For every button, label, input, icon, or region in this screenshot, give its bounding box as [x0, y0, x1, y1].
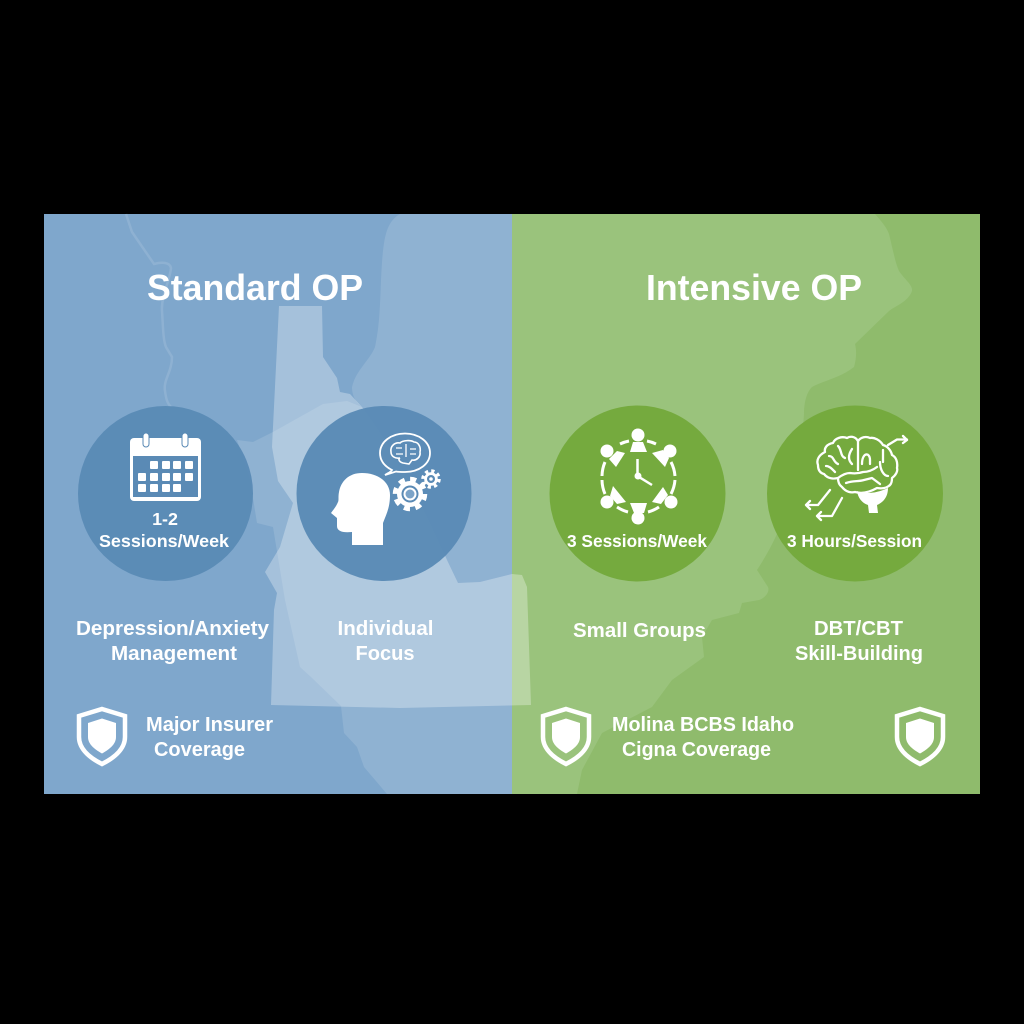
circle label: 1-2 Sessions/Week: 1-2 [152, 509, 178, 529]
circle: 3 hours per session [767, 406, 943, 582]
icon: clock hands and ring arcs [602, 441, 675, 512]
icon: shield green panel right [897, 709, 943, 764]
label: Major Insurer Coverage: Major Insurer [146, 713, 273, 736]
circle label: 3 Hours/Session: 3 Hours/Session [787, 531, 922, 551]
icon: group around clock [600, 428, 678, 524]
label: Molina BCBS Idaho Cigna Coverage: Cigna Coverage [622, 738, 771, 761]
icon: small gear [423, 471, 439, 487]
label: Depression/Anxiety Management [76, 617, 270, 665]
icon: shield green panel left [543, 709, 589, 764]
label: Major Insurer Coverage [146, 713, 273, 761]
heading: Standard OP: Standard OP [147, 268, 363, 308]
map: Idaho state silhouette [265, 306, 531, 708]
label: Major Insurer Coverage: Coverage [154, 738, 245, 761]
label: Small Groups: Small Groups [573, 619, 706, 642]
icon: speech bubble with brain [380, 434, 430, 475]
icon: shield left panel [79, 709, 125, 764]
label: Individual Focus [338, 617, 434, 665]
label: Molina BCBS Idaho Cigna Coverage [612, 713, 794, 761]
label: Depression/Anxiety Management: Management [111, 642, 237, 665]
circle: 1-2 sessions per week [78, 406, 253, 581]
label: Individual Focus: Focus [356, 642, 414, 665]
icon: brain with arrows [806, 436, 907, 520]
label: Individual Focus: Individual [338, 617, 434, 640]
panel: intensive OP background [512, 214, 980, 794]
panel: standard OP background [44, 214, 512, 794]
heading: Intensive OP: Intensive OP [646, 268, 862, 308]
icon: head silhouette [331, 473, 390, 545]
icon: cerebellum and stem [857, 488, 888, 513]
icon: calendar [130, 433, 201, 501]
circle: 3 sessions per week [550, 406, 726, 582]
circle label: 3 Sessions/Week: 3 Sessions/Week [567, 531, 707, 551]
circle: individual focus [296, 406, 472, 581]
label: Molina BCBS Idaho Cigna Coverage: Molina BCBS Idaho [612, 713, 794, 736]
label: DBT/CBT Skill-Building: Skill-Building [795, 642, 923, 665]
circle label: 1-2 Sessions/Week: Sessions/Week [99, 531, 229, 551]
icon: large gear [396, 480, 424, 508]
circle label: 1-2 Sessions/Week [99, 509, 229, 551]
label: DBT/CBT Skill-Building [795, 617, 923, 665]
label: Depression/Anxiety Management: Depression/Anxiety [76, 617, 270, 640]
label: DBT/CBT Skill-Building: DBT/CBT [814, 617, 903, 640]
